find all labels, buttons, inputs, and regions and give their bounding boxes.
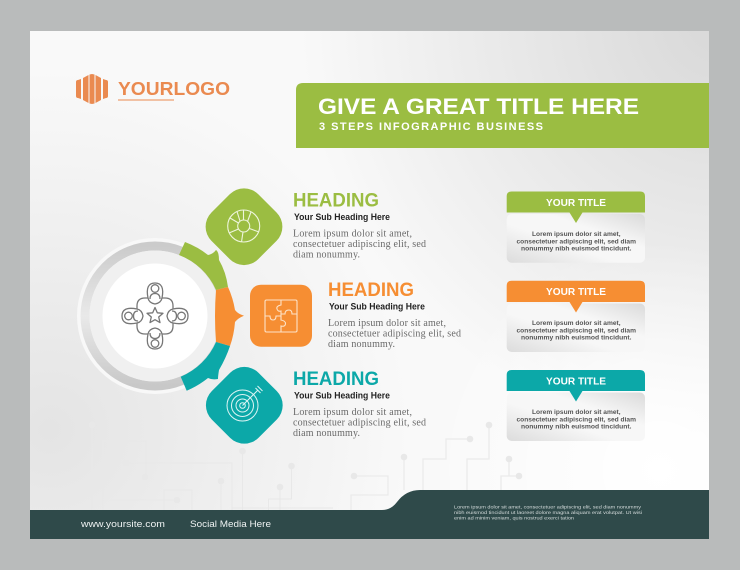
footer (30, 490, 709, 539)
orange arc with pointer (215, 287, 244, 346)
logo wordmark: YOURLOGO (118, 78, 230, 99)
icon: orange square (250, 285, 312, 347)
title: GIVE A GREAT TITLE HERE (318, 94, 639, 119)
icon: logo hexagon bars (76, 74, 108, 104)
body text: consectetuer adipiscing elit, sed (293, 239, 426, 250)
callout card: teal: YOUR TITLE (546, 377, 606, 388)
title banner (296, 83, 709, 148)
sub heading: Your Sub Heading Here (329, 302, 425, 312)
sub heading: Your Sub Heading Here (294, 390, 390, 400)
central circular diagram (77, 238, 244, 394)
callout card: teal: nonummy nibh euismod tincidunt. (521, 424, 632, 431)
website: www.yoursite.com (80, 519, 165, 530)
heading: HEADING (293, 190, 379, 212)
icon: target (227, 386, 262, 421)
step 1: green (197, 180, 426, 273)
footer text: nibh euismod tincidunt ut laoreet dolore magna aliquam erat volutpat. Ut wisi (454, 510, 642, 515)
outer grey ring (77, 238, 233, 394)
step 3: teal (198, 359, 426, 452)
footer text: enim ad minim veniam, quis nostrud exerci tation (454, 516, 575, 520)
sub heading: Your Sub Heading Here (294, 212, 390, 222)
body text: diam nonummy. (293, 250, 360, 260)
body text: Lorem ipsum dolor sit amet, (328, 318, 446, 329)
teal arc with pointer (181, 342, 230, 391)
callout card: teal (507, 370, 645, 441)
logo (76, 74, 230, 104)
callout card: green: YOUR TITLE (546, 198, 606, 209)
heading: HEADING (328, 280, 414, 301)
footer text (454, 504, 642, 520)
callout card: orange (507, 281, 645, 352)
icon: green diamond (197, 180, 291, 273)
icon: team around a table (122, 283, 188, 349)
body text: diam nonummy. (328, 339, 395, 350)
body text (293, 407, 426, 439)
white centre (102, 264, 208, 368)
body text: consectetuer adipiscing elit, sed (328, 328, 461, 340)
body text (293, 228, 426, 260)
callout card: green (507, 192, 645, 263)
icon: teal diamond (198, 359, 291, 452)
callout card: green: nonummy nibh euismod tincidunt. (521, 246, 632, 253)
body text: consectetuer adipiscing elit, sed (293, 418, 426, 428)
body text: Lorem ipsum dolor sit amet, (293, 228, 412, 240)
icon: puzzle (265, 300, 297, 332)
callout card: green: consectetuer adipiscing elit, sed diam (516, 238, 636, 246)
callout card: teal: Lorem ipsum dolor sit amet, (532, 409, 621, 416)
body text: diam nonummy. (293, 428, 360, 439)
callout card: green: Lorem ipsum dolor sit amet, (532, 231, 621, 238)
heading: HEADING (293, 369, 379, 390)
footer text: Lorem ipsum dolor sit amet, consectetuer adipiscing elit, sed diam nonummy (454, 504, 642, 510)
callout card: teal: consectetuer adipiscing elit, sed diam (516, 416, 636, 424)
callout card: orange: YOUR TITLE (546, 287, 606, 298)
callout card: orange: consectetuer adipiscing elit, sed diam (516, 328, 636, 334)
social: Social Media Here (190, 519, 271, 530)
body text: Lorem ipsum dolor sit amet, (293, 407, 412, 418)
body text (328, 318, 461, 350)
green arc with pointer (179, 242, 228, 290)
callout card: orange: nonummy nibh euismod tincidunt. (521, 335, 632, 342)
callout card: orange: Lorem ipsum dolor sit amet, (532, 320, 621, 327)
icon: segmented donut (228, 210, 260, 242)
subtitle: 3 STEPS INFOGRAPHIC BUSINESS (319, 121, 543, 133)
step 2: orange (250, 280, 461, 350)
